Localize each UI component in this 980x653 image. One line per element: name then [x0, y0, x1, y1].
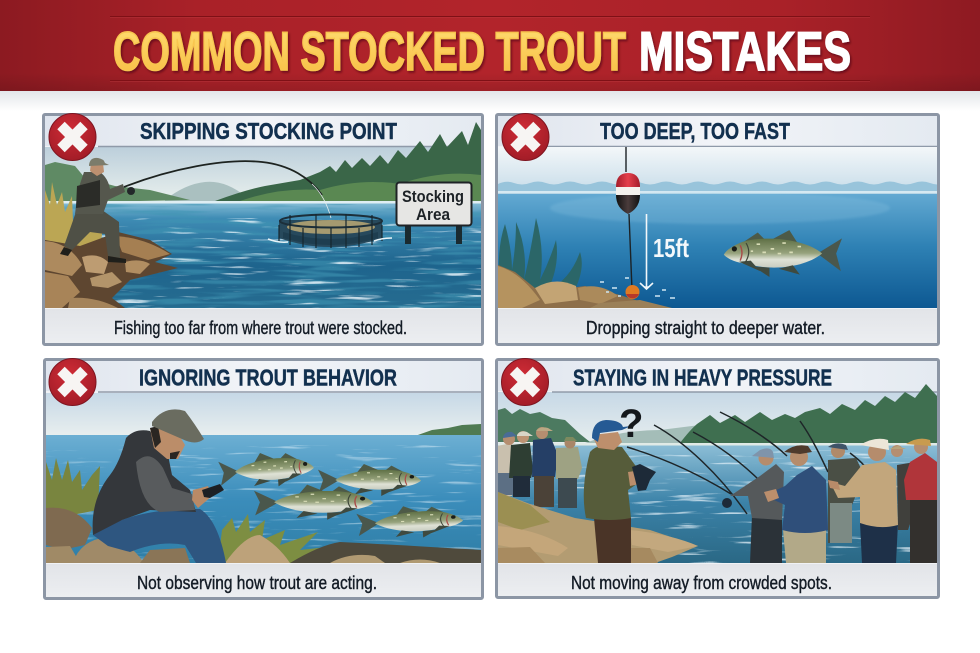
- rocks: [46, 508, 290, 563]
- grass on the bank: [45, 182, 104, 250]
- depth label: 15ft: [653, 233, 689, 263]
- rocky bank: [498, 492, 698, 563]
- panel header strip: [46, 361, 481, 391]
- sign: stocking area: Area: [416, 205, 450, 224]
- panel: ignoring trout behavior: [44, 360, 482, 598]
- caption strip: [498, 309, 937, 343]
- shoreline pebbles: [290, 542, 481, 563]
- stocking cage: [268, 214, 392, 248]
- sign: stocking area: [396, 182, 472, 244]
- angler: blue cap, question mark: [584, 402, 656, 563]
- caption: Not moving away from crowded spots.: [571, 573, 832, 593]
- caption strip: [498, 564, 937, 596]
- scene: crowded bank: [497, 384, 937, 563]
- heading: STAYING IN HEAVY PRESSURE: [573, 364, 832, 390]
- panel header strip: [498, 116, 937, 146]
- banner shadow: [0, 91, 980, 111]
- icon: sinker: [626, 285, 640, 299]
- scene: lake with man on phone: [46, 393, 481, 563]
- fish school: [218, 450, 464, 540]
- icon: red X badge 2: [502, 114, 549, 160]
- title banner: [0, 0, 980, 91]
- scene: river with stocking cage: [45, 122, 481, 308]
- rocks on the bank: [45, 232, 178, 308]
- caption strip: [46, 564, 481, 597]
- fishing rod and line: [124, 161, 322, 195]
- heading: TOO DEEP, TOO FAST: [600, 118, 790, 144]
- icon: man looking at phone: [93, 409, 226, 563]
- left group of anglers: [497, 427, 582, 508]
- panel: skipping stocking point: [44, 114, 482, 344]
- icon: red X badge 4: [502, 358, 548, 406]
- panel: staying in heavy pressure: [496, 360, 938, 598]
- depth arrow: [640, 214, 653, 289]
- icon: fisherman casting: [60, 158, 135, 263]
- icon: red X badge 3: [49, 358, 96, 406]
- foreground grass: [220, 514, 320, 563]
- scene: underwater cross-section: [498, 146, 946, 308]
- reel: [722, 498, 732, 508]
- fishing line: [626, 146, 632, 290]
- question mark: ?: [619, 402, 643, 446]
- panel header strip: [45, 116, 481, 146]
- title: common stocked trout: COMMON STOCKED TROUT: [113, 20, 626, 82]
- left grass: [46, 458, 100, 520]
- seaweed: [499, 218, 582, 295]
- heading: SKIPPING STOCKING POINT: [140, 118, 398, 144]
- caption: Not observing how trout are acting.: [137, 573, 377, 593]
- title: mistakes: MISTAKES: [639, 20, 851, 82]
- bubbles near sinker: [600, 278, 675, 298]
- sign: stocking area: Stocking: [402, 187, 464, 206]
- rods: [627, 412, 866, 514]
- icon: trout: [724, 230, 842, 277]
- icon: red and white bobber: [616, 173, 640, 214]
- right crowd of anglers: [730, 439, 937, 563]
- caption: Fishing too far from where trout were stocked.: [114, 318, 407, 338]
- caption: Dropping straight to deeper water.: [586, 318, 825, 338]
- icon: red X badge 1: [49, 114, 96, 160]
- caption strip: [45, 309, 481, 343]
- sand and rocks: [498, 265, 672, 308]
- heading: IGNORING TROUT BEHAVIOR: [139, 364, 397, 390]
- panel: too deep, too fast: [496, 114, 946, 344]
- panel header strip: [498, 361, 937, 391]
